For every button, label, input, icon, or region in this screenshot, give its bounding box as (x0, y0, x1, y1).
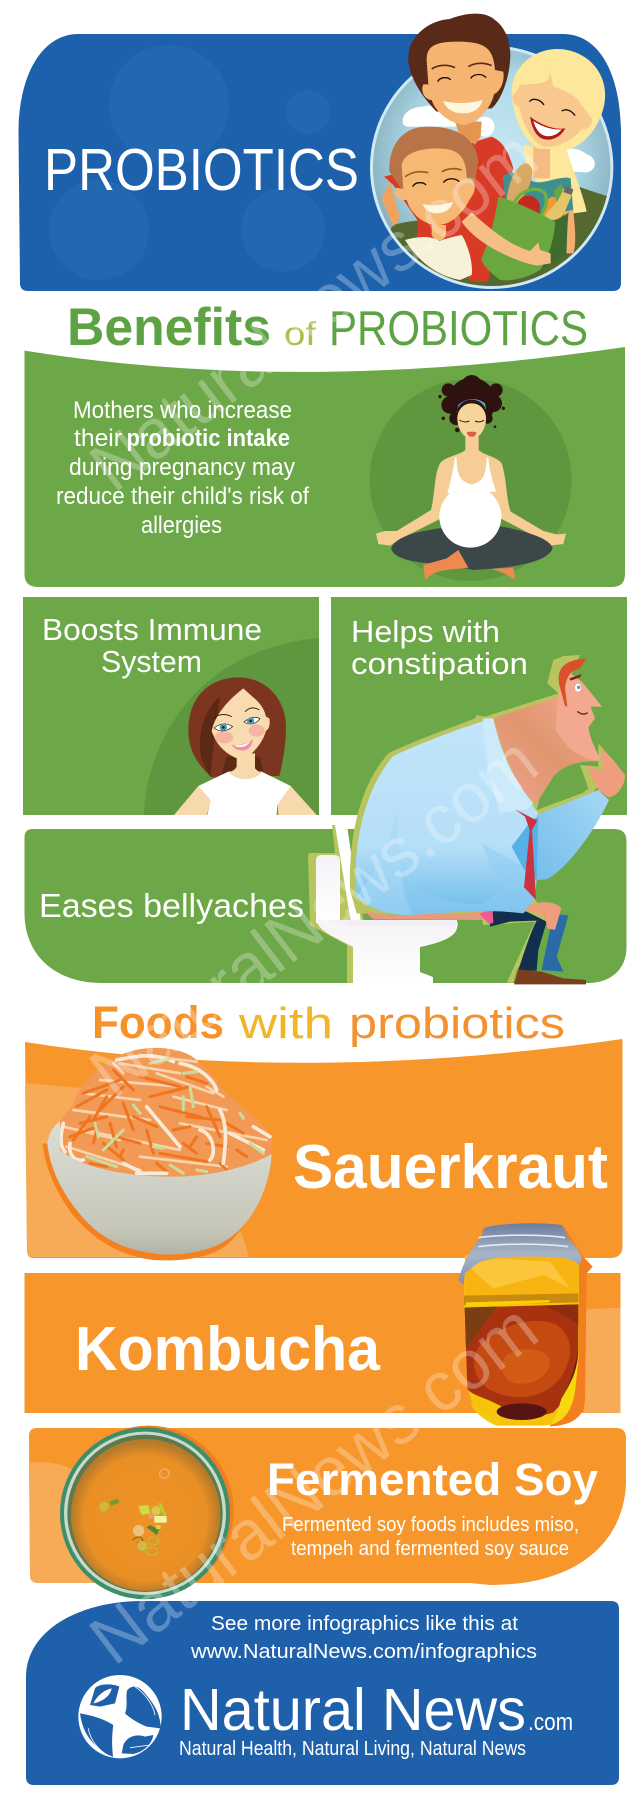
tagline: Natural Health, Natural Living, Natural News (179, 1738, 526, 1760)
skin band (363, 910, 493, 920)
text: pregnancy: allergies (141, 512, 222, 539)
tie (515, 809, 537, 900)
illustration: family in circle (370, 14, 617, 292)
text: Kombucha (75, 1315, 380, 1384)
illustration: bowl of sauerkraut (43, 1048, 272, 1260)
heading: foods with probiotics: probiotics (349, 999, 565, 1048)
hand at chin (587, 747, 625, 797)
front pants (490, 908, 547, 971)
logo wordmark: Natural News (180, 1677, 526, 1743)
text (351, 614, 528, 681)
watermarks: NaturalNews.com (76, 721, 552, 1112)
text: pregnancy: their (74, 425, 122, 452)
heading: benefits of probiotics (67, 298, 588, 357)
illustration: smiling girl (174, 677, 317, 815)
white top and belly (447, 458, 496, 493)
illustration: miso soup bowl (60, 1426, 234, 1599)
text: constipation (351, 646, 528, 681)
panel: footer (26, 1601, 619, 1785)
text: Eases bellyaches (39, 887, 304, 924)
back leg (542, 914, 568, 972)
watermarks (76, 115, 552, 1679)
illustration: toilet (308, 825, 458, 983)
panel: helps with constipation (331, 597, 627, 815)
panel: fermented soy: Fermented soy foods includes miso, (282, 1514, 579, 1536)
text: Sauerkraut (293, 1133, 608, 1202)
text (42, 612, 262, 679)
neck (493, 697, 602, 803)
text: fermented soy: Fermented Soy (267, 1454, 598, 1505)
panel: fermented soy: tempeh and fermented soy sauce (291, 1538, 569, 1560)
body (376, 437, 566, 546)
title: PROBIOTICS (44, 137, 359, 203)
illustration: kombucha jar (458, 1223, 593, 1426)
collar (483, 718, 533, 813)
curly hair (438, 375, 505, 432)
text: pregnancy (56, 397, 309, 539)
text: see more: See more infographics like this at (211, 1613, 518, 1635)
illustration: thinking man (350, 655, 625, 984)
panel: boosts immune system (23, 597, 319, 815)
slaw strands (61, 1055, 270, 1173)
panel: eases bellyaches (24, 829, 626, 983)
panel: header (18, 34, 621, 291)
shirt (356, 718, 538, 915)
legs (391, 527, 553, 570)
text: pregnancy: during pregnancy may (69, 454, 295, 481)
heading: foods with probiotics: with (238, 999, 333, 1048)
hand on knee (525, 902, 561, 930)
head (555, 670, 602, 761)
heading: benefits of probiotics: PROBIOTICS (329, 302, 588, 356)
panel: kombucha (24, 1223, 620, 1426)
heading: foods with probiotics: Foods (92, 997, 224, 1048)
heading: benefits of probiotics: of (284, 315, 317, 352)
olive outline (350, 655, 610, 983)
panel: sauerkraut (25, 1039, 622, 1260)
heading: benefits of probiotics: Benefits (67, 298, 271, 357)
icon: natural news globe (78, 1675, 162, 1758)
panel: fermented soy (29, 1426, 626, 1599)
watermarks: NaturalNews.com (76, 115, 552, 506)
text: see more: www.NaturalNews.com/infographics (190, 1641, 537, 1663)
panel: pregnancy benefit (24, 347, 625, 587)
text: pregnancy: reduce their child's risk of (56, 483, 309, 510)
illustration: meditating pregnant woman (376, 375, 566, 580)
shoe (514, 969, 586, 984)
heading: foods with probiotics (92, 997, 565, 1048)
text: pregnancy: Mothers who increase (73, 397, 292, 424)
text: System (101, 644, 202, 679)
text: pregnancy: probiotic intake (126, 425, 290, 452)
watermarks: NaturalNews.com (76, 1288, 552, 1679)
text: Helps with (351, 614, 500, 649)
text: Boosts Immune (42, 612, 262, 647)
sleeve (535, 790, 609, 880)
panel: footer: .com (528, 1709, 573, 1736)
text: see more (190, 1613, 537, 1663)
